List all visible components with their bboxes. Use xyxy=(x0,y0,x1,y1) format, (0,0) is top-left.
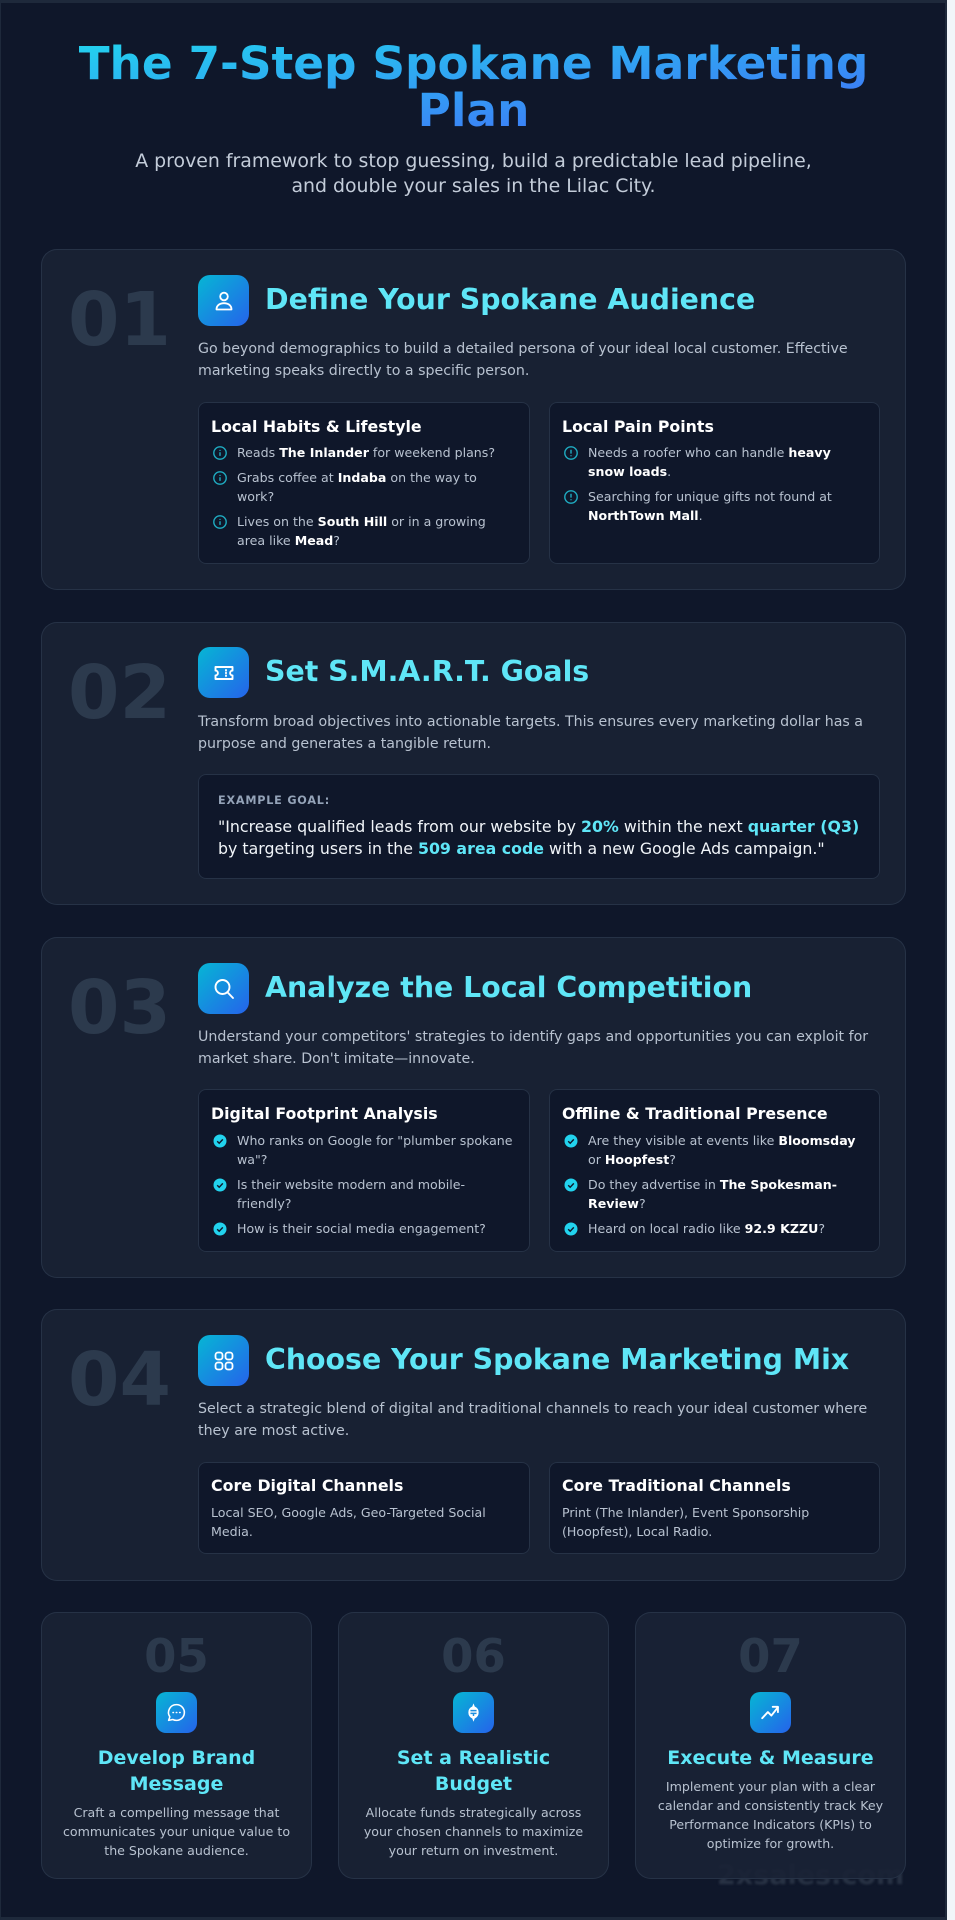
list item: How is their social media engagement? xyxy=(237,1221,486,1236)
panel: step 4 marketing mix xyxy=(41,1309,906,1581)
description: market share. Don't imitate—innovate. xyxy=(198,1051,475,1067)
step text xyxy=(658,1779,883,1851)
list item xyxy=(213,514,486,548)
body text xyxy=(562,1505,809,1539)
callout quote: by targeting users in the 509 area code with a new Google Ads campaign." xyxy=(218,839,825,858)
list item: NorthTown Mall. xyxy=(588,508,703,523)
step title xyxy=(397,1747,550,1795)
heading: Set S.M.A.R.T. Goals xyxy=(265,655,589,688)
list item xyxy=(564,444,831,479)
sub-panel: digital channels xyxy=(198,1462,530,1554)
step text xyxy=(364,1804,583,1858)
list item xyxy=(213,470,477,504)
step title: Develop Brand xyxy=(98,1747,255,1769)
sub-panel: offline presence xyxy=(549,1089,880,1252)
sub-panel: traditional channels xyxy=(549,1462,880,1554)
list item: area like Mead? xyxy=(237,533,340,548)
list item: Grabs coffee at Indaba on the way to xyxy=(237,470,477,485)
panel: step 3 competition xyxy=(41,937,906,1278)
list item: Who ranks on Google for "plumber spokane xyxy=(237,1132,513,1148)
icon: user xyxy=(198,275,249,326)
heading: Analyze the Local Competition xyxy=(265,971,752,1004)
step text: communicates your unique value to xyxy=(63,1824,290,1838)
heading: Define Your Spokane Audience xyxy=(265,283,755,316)
step title: Message xyxy=(130,1773,223,1795)
list item: Heard on local radio like 92.9 KZZU? xyxy=(588,1221,825,1236)
step text: your chosen channels to maximize xyxy=(364,1824,583,1838)
icon: grid xyxy=(198,1335,249,1386)
body text xyxy=(211,1505,486,1539)
sub-heading: Offline & Traditional Presence xyxy=(562,1104,828,1123)
icon: magnifier xyxy=(198,963,249,1014)
list item: friendly? xyxy=(237,1196,291,1211)
sub-heading: Core Digital Channels xyxy=(211,1476,403,1495)
sub-heading: Local Pain Points xyxy=(562,417,714,436)
description: they are most active. xyxy=(198,1423,349,1439)
step text: Implement your plan with a clear xyxy=(666,1779,875,1794)
title: The 7-Step Spokane Marketing xyxy=(79,37,868,90)
step title: Budget xyxy=(435,1773,512,1795)
list item: Searching for unique gifts not found at xyxy=(588,489,832,504)
description xyxy=(198,1401,867,1439)
list item xyxy=(214,1132,513,1167)
list item: Are they visible at events like Bloomsday xyxy=(588,1132,856,1148)
body text: (Hoopfest), Local Radio. xyxy=(562,1524,712,1539)
list item xyxy=(564,489,832,523)
step text: your return on investment. xyxy=(389,1842,558,1858)
step text: Craft a compelling message that xyxy=(74,1804,279,1820)
step text: Allocate funds strategically across xyxy=(366,1804,581,1820)
list item: wa"? xyxy=(237,1152,268,1167)
step text: optimize for growth. xyxy=(707,1836,834,1851)
list item: Is their website modern and mobile- xyxy=(237,1177,465,1192)
icon: trend arrow xyxy=(750,1692,791,1733)
list item xyxy=(564,1177,837,1211)
callout label: EXAMPLE GOAL: xyxy=(218,794,330,807)
step number 01: 01 xyxy=(68,277,171,363)
sub-panel: pain points xyxy=(549,402,880,564)
description xyxy=(198,341,848,379)
panel: step 7 execute xyxy=(635,1612,906,1879)
step title: Execute & Measure xyxy=(667,1747,874,1769)
description xyxy=(198,1029,868,1067)
sub-panel: local habits xyxy=(198,402,530,564)
step number 07: 07 xyxy=(738,1629,803,1683)
panel: step 5 brand message xyxy=(41,1612,312,1879)
step number 02: 02 xyxy=(68,650,171,736)
icon: coin xyxy=(453,1692,494,1733)
description xyxy=(198,714,863,752)
panel: step 2 smart goals xyxy=(41,622,906,905)
description: Select a strategic blend of digital and traditional channels to reach your ideal customer where xyxy=(198,1401,867,1417)
sub-heading: Core Traditional Channels xyxy=(562,1476,791,1495)
panel: step 6 budget xyxy=(338,1612,609,1879)
step text: Performance Indicators (KPIs) to xyxy=(669,1817,872,1832)
step number 03: 03 xyxy=(68,965,171,1051)
icon: chat bubble xyxy=(156,1692,197,1733)
description: purpose and generates a tangible return. xyxy=(198,736,491,752)
description: Understand your competitors' strategies to identify gaps and opportunities you can exploit for xyxy=(198,1029,868,1045)
title xyxy=(79,37,868,137)
list item: or Hoopfest? xyxy=(588,1152,676,1167)
list item: Do they advertise in The Spokesman- xyxy=(588,1177,837,1192)
step number 04: 04 xyxy=(68,1337,171,1423)
step number 06: 06 xyxy=(441,1629,506,1683)
description: marketing speaks directly to a specific person. xyxy=(198,363,529,379)
callout quote: "Increase qualified leads from our website by 20% within the next quarter (Q3) xyxy=(218,817,859,836)
heading: Choose Your Spokane Marketing Mix xyxy=(265,1343,849,1376)
body text: Media. xyxy=(211,1524,253,1539)
callout: example goal xyxy=(198,774,880,879)
description: Transform broad objectives into actionable targets. This ensures every marketing dollar has a xyxy=(198,714,863,730)
description: Go beyond demographics to build a detailed persona of your ideal local customer. Effective xyxy=(198,341,848,357)
icon: ticket xyxy=(198,647,249,698)
subtitle: and double your sales in the Lilac City. xyxy=(291,175,656,197)
step number 05: 05 xyxy=(144,1629,209,1683)
list item: Review? xyxy=(588,1196,646,1211)
list item xyxy=(214,1177,465,1211)
body text: Print (The Inlander), Event Sponsorship xyxy=(562,1505,809,1520)
sub-heading: Local Habits & Lifestyle xyxy=(211,417,422,436)
sub-heading: Digital Footprint Analysis xyxy=(211,1104,438,1123)
title: Plan xyxy=(418,84,529,137)
callout quote xyxy=(218,817,859,858)
list item: Lives on the South Hill or in a growing xyxy=(237,514,486,529)
step title: Set a Realistic xyxy=(397,1747,550,1769)
list item: work? xyxy=(237,489,274,504)
subtitle: A proven framework to stop guessing, build a predictable lead pipeline, xyxy=(135,150,812,172)
list item: snow loads. xyxy=(588,464,671,479)
step title xyxy=(98,1747,255,1795)
step text: calendar and consistently track Key xyxy=(658,1798,883,1813)
list item: Needs a roofer who can handle heavy xyxy=(588,444,831,460)
watermark: 2xsales.com xyxy=(717,1860,904,1891)
list item xyxy=(564,1132,856,1167)
step text xyxy=(63,1804,290,1858)
subtitle xyxy=(135,150,812,197)
list item: Reads The Inlander for weekend plans? xyxy=(237,444,495,460)
step text: the Spokane audience. xyxy=(104,1842,249,1858)
panel: step 1 define audience xyxy=(41,249,906,590)
sub-panel: digital footprint xyxy=(198,1089,530,1252)
body text: Local SEO, Google Ads, Geo-Targeted Social xyxy=(211,1505,486,1520)
